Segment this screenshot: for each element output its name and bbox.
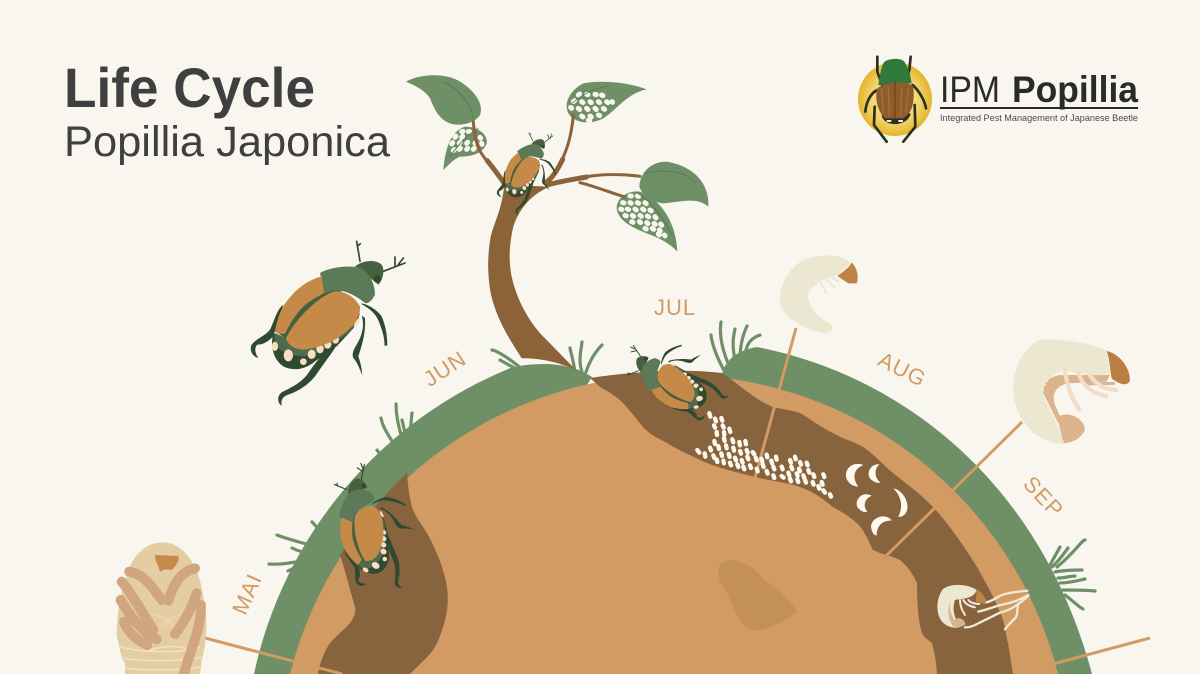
label JUN: JUN: [419, 346, 471, 392]
branch bases: [487, 159, 587, 186]
soil layer top: [590, 371, 1013, 674]
beetle climbing from soil: [296, 456, 447, 605]
month labels: [227, 295, 1069, 618]
leaf eaten top right: [567, 82, 647, 122]
title: [64, 56, 390, 166]
beetle flying: [251, 241, 405, 406]
grub with roots in soil: [937, 585, 1028, 629]
heading: Life Cycle: [64, 56, 315, 119]
beetle on tree: [483, 126, 572, 219]
globe: soil and grass: [254, 347, 1092, 674]
beetle laying eggs: [621, 327, 732, 434]
tree: [406, 75, 708, 370]
label AUG: AUG: [874, 347, 931, 392]
soil circle: [290, 375, 1058, 674]
leaf eaten bottom right: [617, 191, 677, 252]
label JUL: JUL: [654, 295, 696, 320]
leaf veins: [443, 82, 695, 235]
grub body: [937, 585, 977, 628]
young larvae crescents: [846, 464, 908, 536]
leaf whole top left: [406, 75, 481, 125]
logo tagline: Integrated Pest Management of Japanese Beetle: [940, 113, 1138, 123]
stone: [718, 560, 797, 630]
label MAI: MAI: [227, 570, 267, 618]
grass tufts: [269, 322, 1095, 609]
pupa: [117, 542, 206, 674]
timeline spokes: [205, 328, 1150, 674]
logo wordmark: IPM: [940, 69, 1000, 110]
label SEP: SEP: [1018, 471, 1069, 523]
grass band left: [254, 364, 592, 674]
grass band right: [722, 347, 1092, 674]
branches: [473, 115, 640, 197]
small grub: [780, 255, 858, 333]
subtitle: Popillia Japonica: [64, 118, 390, 166]
leaf whole right: [639, 162, 708, 207]
roots: [965, 591, 1028, 629]
logo: IPM Popillia: [858, 57, 1138, 142]
logo badge with beetle: [858, 57, 932, 142]
logo: IPM Popillia: Popillia: [1012, 69, 1138, 110]
large grub: [1013, 340, 1130, 443]
leaf eaten lower left: [443, 127, 487, 170]
soil layer left: [318, 473, 448, 674]
trunk: [488, 185, 576, 370]
eggs: [697, 413, 831, 497]
leaf holes: [452, 94, 665, 236]
